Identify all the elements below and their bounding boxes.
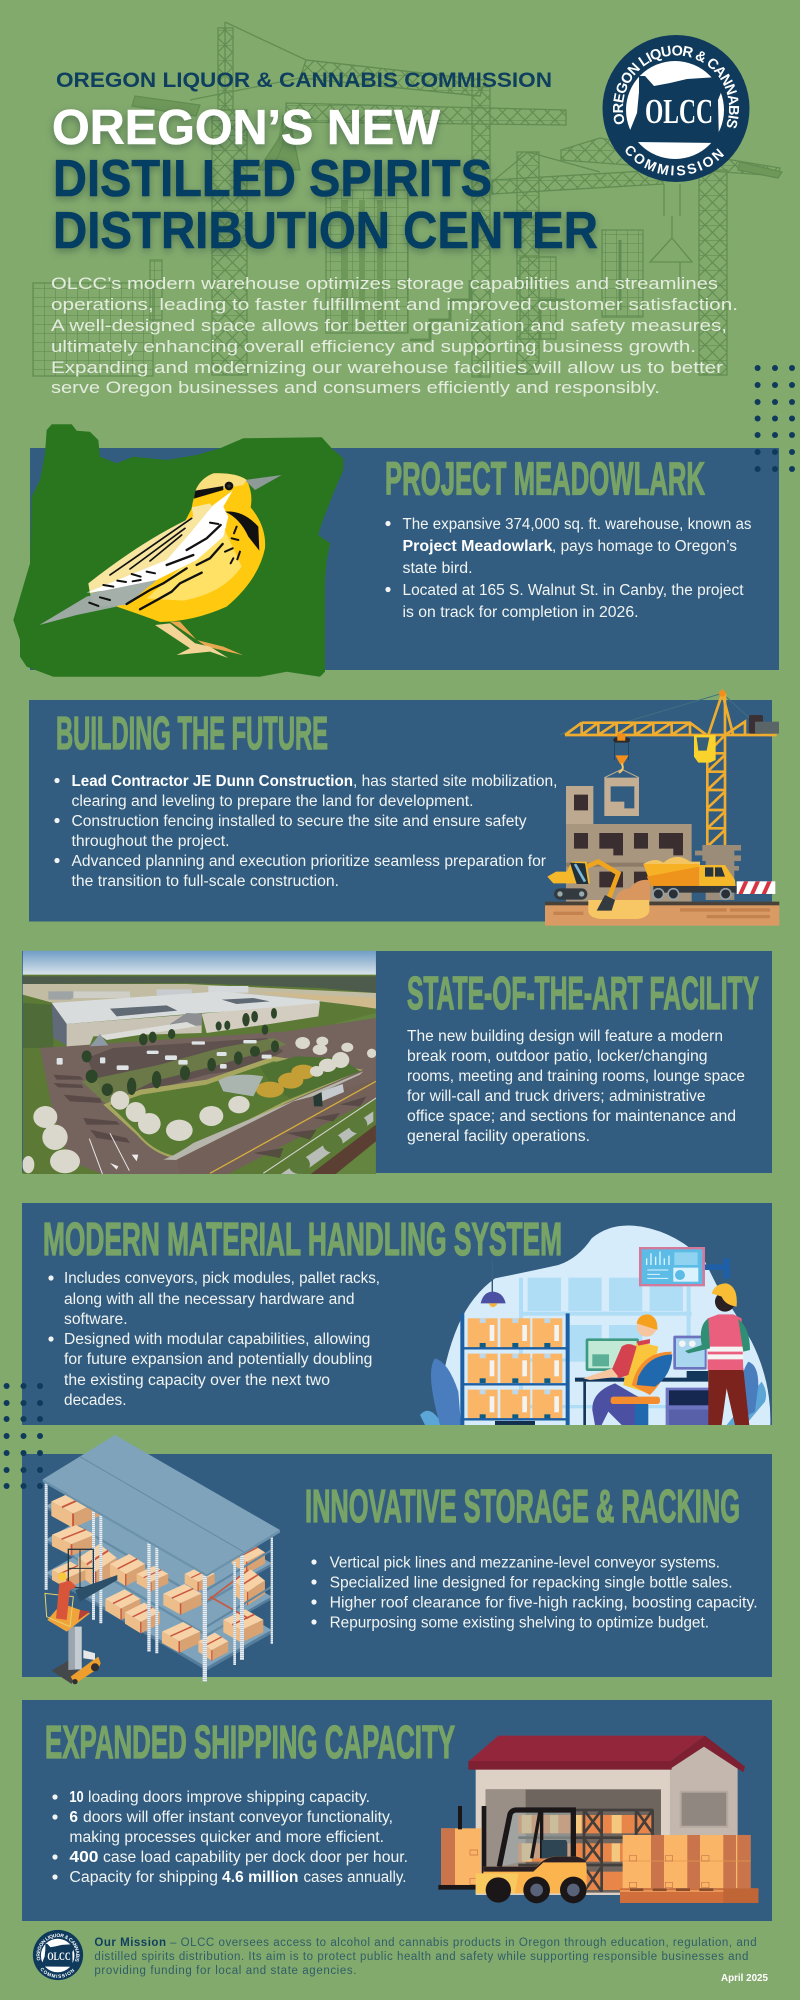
intro paragraph: operations, leading to faster fulfillment and improved customer satisfaction. xyxy=(51,296,738,314)
illustration: isometric rack shelving with lift xyxy=(43,1435,280,1684)
text: shipping capacity bullets: 4.6 million xyxy=(222,1869,298,1886)
illustration: construction site with tower crane xyxy=(545,690,779,926)
panel: innovative storage and racking xyxy=(22,1454,772,1677)
text: building the future bullets xyxy=(54,773,558,890)
text: shipping capacity bullets xyxy=(52,1789,408,1886)
logo: OLCC seal: OREGON LIQUOR & CANNABIS xyxy=(613,45,740,128)
text: building the future bullets: , has started site mobilization, xyxy=(353,773,558,790)
logo: small OLCC seal in footer: OREGON LIQUOR & CANNABIS xyxy=(36,1934,80,1962)
heading: organisation name: OREGON LIQUOR & CANNABIS COMMISSION xyxy=(56,69,552,92)
text: building the future bullets: Construction fencing installed to secure the site and ensure safety xyxy=(72,813,527,830)
heading: expanded shipping capacity: EXPANDED SHIPPING CAPACITY xyxy=(45,1716,455,1768)
text: facility description xyxy=(407,1028,745,1145)
text: storage and racking bullets: Vertical pick lines and mezzanine-level conveyor systems. xyxy=(330,1554,720,1572)
text: shipping capacity bullets: cases annually. xyxy=(304,1869,406,1886)
text: project meadowlark bullets: is on track for completion in 2026. xyxy=(402,604,638,621)
text: mission statement: – OLCC oversees access to alcohol and cannabis products in Oregon through education, regulation, and xyxy=(170,1937,757,1949)
intro paragraph xyxy=(51,275,738,397)
text: shipping capacity bullets: 400 xyxy=(69,1849,98,1866)
panel: modern material handling system xyxy=(22,1203,772,1425)
intro paragraph: serve Oregon businesses and consumers efficiently and responsibly. xyxy=(51,379,660,397)
text: storage and racking bullets: Specialized line designed for repacking single bottle sales. xyxy=(330,1574,733,1592)
title: Oregon's new distilled spirits distribution center xyxy=(52,101,598,260)
text: mission statement: providing funding for local and state agencies. xyxy=(94,1965,356,1977)
text: shipping capacity bullets: making processes quicker and more efficient. xyxy=(69,1829,384,1846)
icon: decorative dot grid left xyxy=(4,1383,43,1489)
icon: decorative dot grid right xyxy=(755,365,795,472)
logo: small OLCC seal in footer: COMMISSION xyxy=(40,1968,74,1978)
text: mission statement: Our Mission xyxy=(94,1937,166,1949)
text: shipping capacity bullets: Capacity for shipping xyxy=(69,1869,218,1886)
text: building the future bullets: the transition to full-scale construction. xyxy=(72,873,339,890)
illustration: warehouse with forklift and pallets xyxy=(438,1736,758,1903)
text: material handling bullets: Includes conveyors, pick modules, pallet racks, xyxy=(64,1270,380,1287)
icon: western meadowlark bird xyxy=(39,473,282,658)
text: building the future bullets: clearing and leveling to prepare the land for development. xyxy=(72,793,474,810)
text: facility description: rooms, meeting and training rooms, lounge space xyxy=(407,1068,745,1085)
text: storage and racking bullets xyxy=(311,1554,758,1632)
logo: OLCC seal: COMMISSION xyxy=(626,146,724,176)
text: facility description: break room, outdoor patio, locker/changing xyxy=(407,1048,708,1065)
panel: building the future xyxy=(29,700,772,922)
logo: small OLCC seal in footer: OLCC xyxy=(47,1949,71,1963)
intro paragraph: OLCC’s modern warehouse optimizes storage capabilities and streamlines xyxy=(51,275,718,293)
text: project meadowlark bullets: state bird. xyxy=(402,560,472,577)
text: facility description: general facility operations. xyxy=(407,1128,590,1145)
panel: state-of-the-art facility xyxy=(22,951,772,1173)
title: Oregon's new distilled spirits distribution center: DISTILLED SPIRITS xyxy=(53,150,492,208)
map: green Oregon silhouette xyxy=(13,424,343,677)
intro paragraph: Expanding and modernizing our warehouse facilities will allow us to better xyxy=(51,359,724,377)
text: material handling bullets: decades. xyxy=(64,1392,126,1409)
text: shipping capacity bullets: 10 xyxy=(69,1789,84,1806)
background construction cranes line art xyxy=(33,22,782,377)
text: material handling bullets: for future expansion and potentially doubling xyxy=(64,1351,372,1368)
logo: OLCC seal: OLCC xyxy=(645,92,713,131)
text: material handling bullets xyxy=(48,1270,380,1409)
text: project meadowlark bullets: The expansive 374,000 sq. ft. warehouse, known as xyxy=(402,516,752,533)
text: material handling bullets: Designed with modular capabilities, allowing xyxy=(64,1331,370,1348)
logo: small OLCC seal in footer xyxy=(32,1930,84,1980)
text: shipping capacity bullets: case load capability per dock door per hour. xyxy=(103,1849,408,1866)
text: mission statement: distilled spirits distribution. Its aim is to protect public health and safety while supporting responsible businesses and xyxy=(94,1951,748,1963)
text: building the future bullets: Lead Contractor JE Dunn Construction xyxy=(72,773,353,790)
text: building the future bullets: Advanced planning and execution prioritize seamless preparation for xyxy=(72,853,546,870)
text: project meadowlark bullets: Located at 165 S. Walnut St. in Canby, the project xyxy=(402,582,744,599)
text: shipping capacity bullets: doors will offer instant conveyor functionality, xyxy=(83,1809,393,1826)
text: mission statement xyxy=(94,1937,757,1977)
text: material handling bullets: software. xyxy=(64,1311,128,1328)
text: storage and racking bullets: Higher roof clearance for five-high racking, boosting capacity. xyxy=(330,1594,758,1612)
panel: project meadowlark xyxy=(30,448,779,670)
text: facility description: office space; and sections for maintenance and xyxy=(407,1108,736,1125)
text: facility description: The new building design will feature a modern xyxy=(407,1028,723,1045)
intro paragraph: A well-designed space allows for better organization and safety measures, xyxy=(51,317,727,335)
photo: aerial rendering of the warehouse xyxy=(22,951,376,1175)
text: project meadowlark bullets: , pays homage to Oregon’s xyxy=(552,538,737,555)
title: Oregon's new distilled spirits distribution center: OREGON’S NEW xyxy=(52,101,441,155)
text: material handling bullets: the existing capacity over the next two xyxy=(64,1372,330,1389)
text: project meadowlark bullets: Project Meadowlark xyxy=(402,538,553,555)
text: project meadowlark bullets xyxy=(385,516,752,621)
text: storage and racking bullets: Repurposing some existing shelving to optimize budget. xyxy=(330,1614,709,1632)
text: date: April 2025 xyxy=(721,1972,768,1984)
text: facility description: for will-call and truck drivers; administrative xyxy=(407,1088,706,1105)
intro paragraph: ultimately enhancing overall efficiency and supporting business growth. xyxy=(51,338,696,356)
heading: building the future: BUILDING THE FUTURE xyxy=(56,707,328,759)
illustration: warehouse control room workers xyxy=(420,1226,770,1425)
text: building the future bullets: throughout the project. xyxy=(72,833,229,850)
text: shipping capacity bullets: loading doors improve shipping capacity. xyxy=(88,1789,370,1806)
logo: OLCC seal xyxy=(602,35,750,182)
panel: expanded shipping capacity xyxy=(22,1700,772,1921)
text: material handling bullets: along with all the necessary hardware and xyxy=(64,1291,355,1308)
text: shipping capacity bullets: 6 xyxy=(69,1809,78,1826)
title: Oregon's new distilled spirits distribution center: DISTRIBUTION CENTER xyxy=(53,202,598,260)
